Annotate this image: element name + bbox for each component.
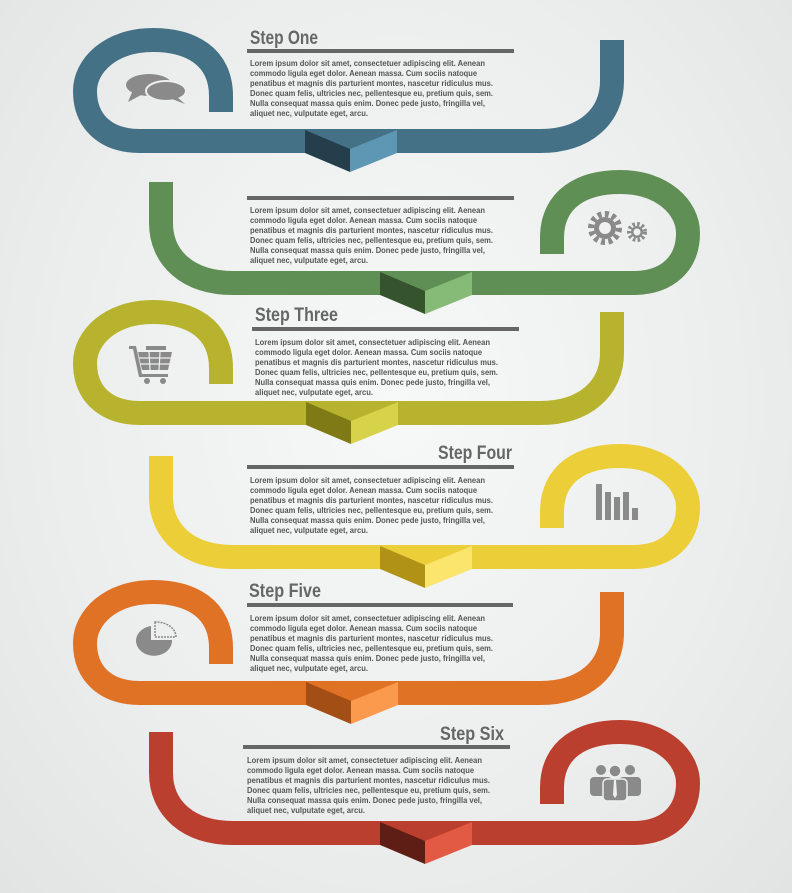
- path band five: [85, 592, 612, 693]
- path band one: [85, 40, 612, 141]
- text one: Nulla consequat massa quis enim. Donec pede justo, fringilla vel,: [250, 98, 485, 108]
- text one: penatibus et magnis dis parturient montes, nascetur ridiculus mus.: [250, 78, 493, 88]
- text one: Donec quam felis, ultricies nec, pellentesque eu, pretium quis, sem.: [250, 88, 493, 98]
- text five: [250, 613, 493, 673]
- heading six: Step Six: [440, 724, 504, 745]
- icon: pie chart: [136, 622, 176, 656]
- text four: [250, 475, 493, 535]
- text five: Donec quam felis, ultricies nec, pellentesque eu, pretium quis, sem.: [250, 643, 493, 653]
- step three: [85, 305, 612, 444]
- step four: [161, 443, 688, 588]
- heading four: Step Four: [438, 443, 512, 464]
- heading five: Step Five: [249, 581, 321, 602]
- icon: people: [590, 765, 641, 801]
- path band two: [161, 182, 688, 283]
- bar four: [247, 465, 514, 469]
- text six: [247, 755, 490, 815]
- text two: Nulla consequat massa quis enim. Donec pede justo, fringilla vel,: [250, 245, 485, 255]
- text one: commodo ligula eget dolor. Aenean massa. Cum sociis natoque: [250, 68, 477, 78]
- chevron two: [380, 272, 472, 314]
- icon: bar chart: [596, 484, 638, 520]
- text three: aliquet nec, vulputate eget, arcu.: [255, 387, 373, 397]
- text five: commodo ligula eget dolor. Aenean massa. Cum sociis natoque: [250, 623, 477, 633]
- text four: commodo ligula eget dolor. Aenean massa. Cum sociis natoque: [250, 485, 477, 495]
- bar two: [247, 196, 514, 200]
- icon: chat bubbles: [126, 74, 186, 104]
- text one: [250, 58, 493, 118]
- text two: aliquet nec, vulputate eget, arcu.: [250, 255, 368, 265]
- text four: Nulla consequat massa quis enim. Donec pede justo, fringilla vel,: [250, 515, 485, 525]
- chevron one: [305, 130, 397, 172]
- text six: aliquet nec, vulputate eget, arcu.: [247, 805, 365, 815]
- text six: Donec quam felis, ultricies nec, pellentesque eu, pretium quis, sem.: [247, 785, 490, 795]
- text three: penatibus et magnis dis parturient montes, nascetur ridiculus mus.: [255, 357, 498, 367]
- text three: Nulla consequat massa quis enim. Donec pede justo, fringilla vel,: [255, 377, 490, 387]
- text six: commodo ligula eget dolor. Aenean massa. Cum sociis natoque: [247, 765, 474, 775]
- path band four: [161, 456, 688, 557]
- bar three: [252, 327, 519, 331]
- chevron five: [306, 682, 398, 724]
- step two: [161, 182, 688, 314]
- path band three: [85, 312, 612, 413]
- text three: [255, 337, 498, 397]
- bar five: [247, 603, 513, 607]
- heading one: Step One: [250, 28, 318, 49]
- text five: penatibus et magnis dis parturient montes, nascetur ridiculus mus.: [250, 633, 493, 643]
- text four: Lorem ipsum dolor sit amet, consectetuer adipiscing elit. Aenean: [250, 475, 485, 485]
- text five: Nulla consequat massa quis enim. Donec pede justo, fringilla vel,: [250, 653, 485, 663]
- text three: commodo ligula eget dolor. Aenean massa. Cum sociis natoque: [255, 347, 482, 357]
- heading three: Step Three: [255, 305, 338, 326]
- path band six: [161, 732, 688, 833]
- step five: [85, 581, 612, 724]
- text two: Donec quam felis, ultricies nec, pellentesque eu, pretium quis, sem.: [250, 235, 493, 245]
- text two: [250, 205, 493, 265]
- text six: penatibus et magnis dis parturient montes, nascetur ridiculus mus.: [247, 775, 490, 785]
- text six: Nulla consequat massa quis enim. Donec pede justo, fringilla vel,: [247, 795, 482, 805]
- chevron four: [380, 546, 472, 588]
- text two: Lorem ipsum dolor sit amet, consectetuer adipiscing elit. Aenean: [250, 205, 485, 215]
- text two: penatibus et magnis dis parturient montes, nascetur ridiculus mus.: [250, 225, 493, 235]
- text five: aliquet nec, vulputate eget, arcu.: [250, 663, 368, 673]
- text three: Donec quam felis, ultricies nec, pellentesque eu, pretium quis, sem.: [255, 367, 498, 377]
- step one: [85, 28, 612, 172]
- text one: Lorem ipsum dolor sit amet, consectetuer adipiscing elit. Aenean: [250, 58, 485, 68]
- chevron three: [306, 402, 398, 444]
- icon: cart: [129, 346, 172, 384]
- text three: Lorem ipsum dolor sit amet, consectetuer adipiscing elit. Aenean: [255, 337, 490, 347]
- text one: aliquet nec, vulputate eget, arcu.: [250, 108, 368, 118]
- bar six: [243, 745, 510, 749]
- step six: [161, 724, 688, 864]
- text two: commodo ligula eget dolor. Aenean massa. Cum sociis natoque: [250, 215, 477, 225]
- text six: Lorem ipsum dolor sit amet, consectetuer adipiscing elit. Aenean: [247, 755, 482, 765]
- text four: Donec quam felis, ultricies nec, pellentesque eu, pretium quis, sem.: [250, 505, 493, 515]
- text four: penatibus et magnis dis parturient montes, nascetur ridiculus mus.: [250, 495, 493, 505]
- text five: Lorem ipsum dolor sit amet, consectetuer adipiscing elit. Aenean: [250, 613, 485, 623]
- bar one: [247, 49, 514, 53]
- chevron six: [380, 822, 472, 864]
- icon: gears: [591, 214, 645, 242]
- text four: aliquet nec, vulputate eget, arcu.: [250, 525, 368, 535]
